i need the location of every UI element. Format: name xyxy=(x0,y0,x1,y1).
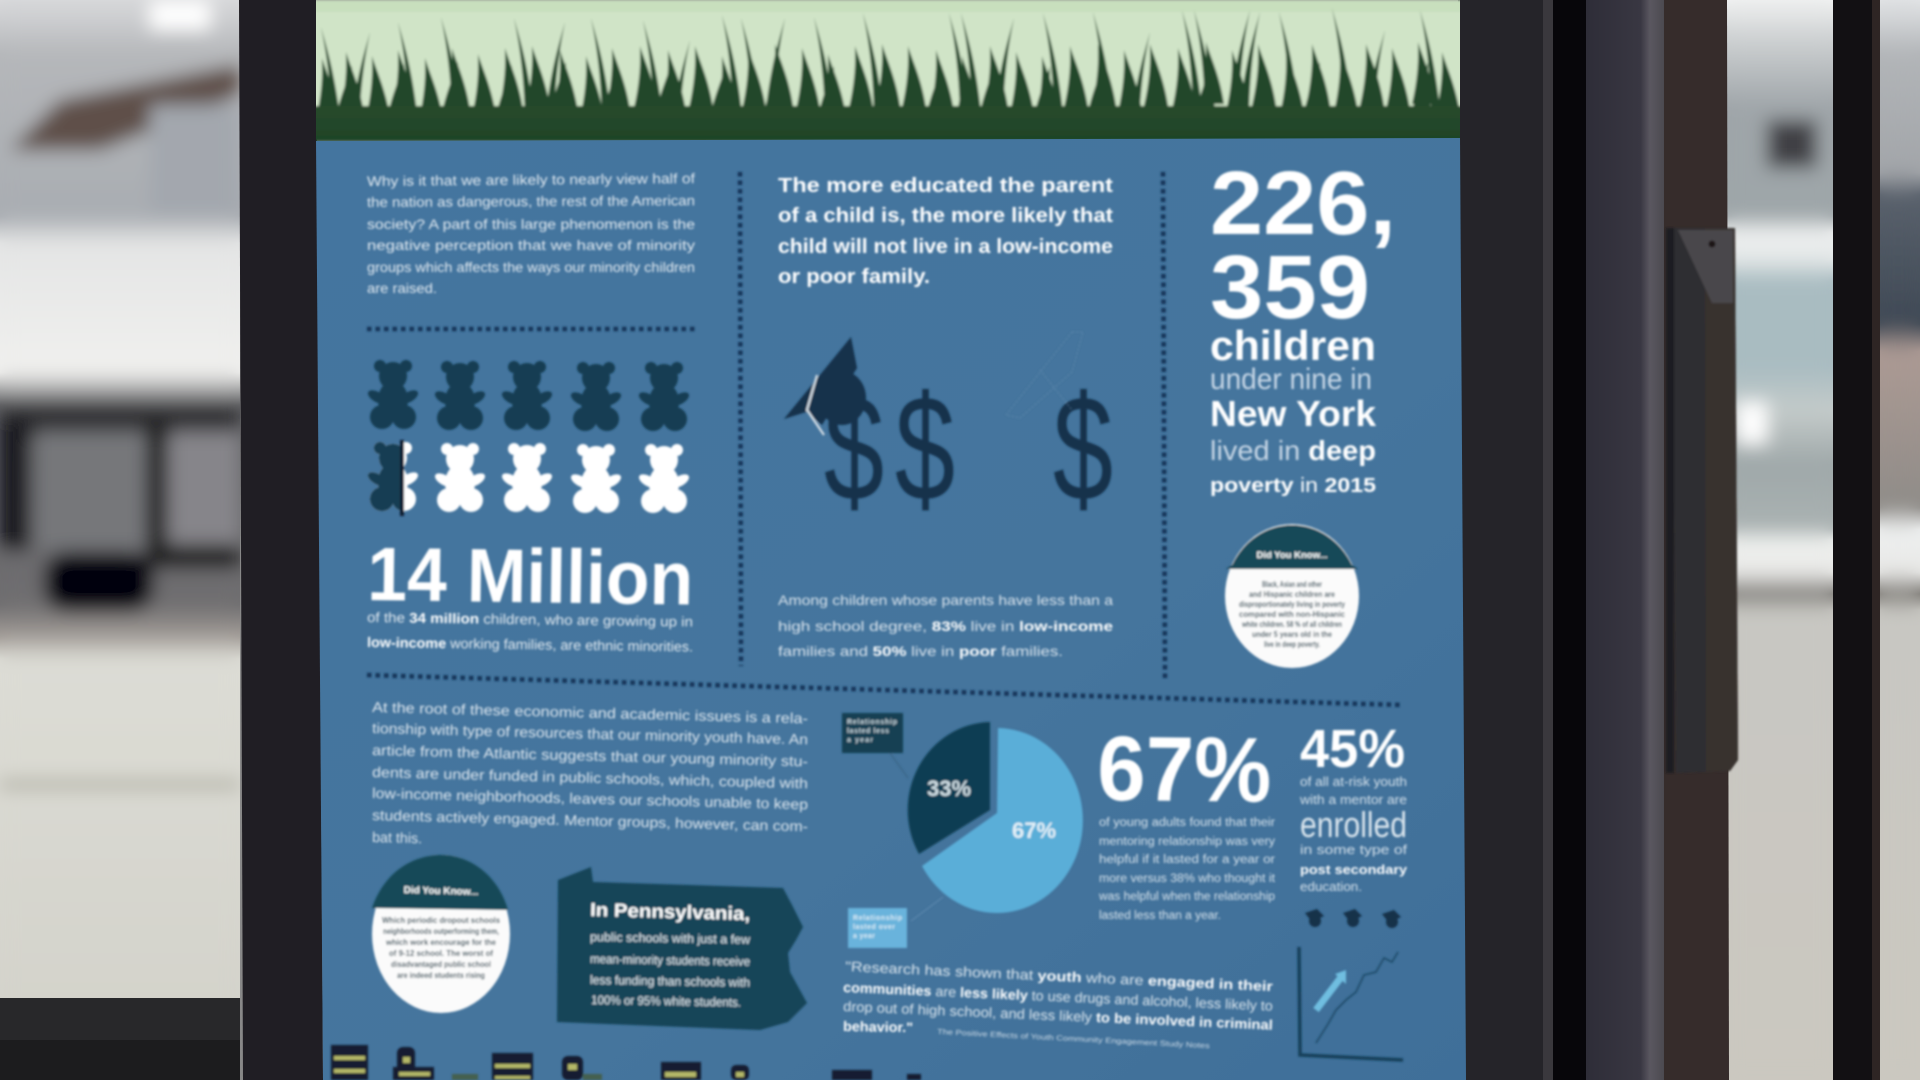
stat: 67%: helpful if it lasted for a year or xyxy=(1099,854,1275,866)
callout: did you know right xyxy=(1225,524,1359,668)
legend: light pie label: a year xyxy=(853,933,875,940)
text: parents caption: high school degree, 83% live in low-income xyxy=(778,618,1113,634)
icon: three small graduation caps xyxy=(1305,909,1401,928)
legend: light pie label xyxy=(848,897,943,948)
callout: did you know right: under 5 years old in the xyxy=(1252,630,1332,639)
text: parents caption xyxy=(778,592,1113,659)
callout: did you know left: Which periodic dropout schools xyxy=(382,916,501,925)
skyline: city buildings with lit windows xyxy=(331,1045,921,1080)
text: bottom left paragraph: bat this. xyxy=(372,830,422,847)
poster content group xyxy=(331,154,1408,1080)
panel: blue poster body xyxy=(316,138,1466,1080)
text: intro paragraph: the nation as dangerous, the rest of the American xyxy=(367,192,695,210)
stat: 67%: lasted less than a year. xyxy=(1099,910,1221,922)
text: 14 million caption: of the 34 million children, who are growing up in xyxy=(367,609,693,630)
legend: dark pie label: lasted less xyxy=(847,728,889,735)
text: intro paragraph: Why is it that we are likely to nearly view half of xyxy=(367,170,695,189)
stat: 45%: education. xyxy=(1300,880,1362,894)
text: bottom left paragraph xyxy=(372,700,808,847)
stat: 67%: more versus 38% who thought it xyxy=(1099,873,1276,885)
text: intro paragraph xyxy=(367,170,695,296)
frame: left poster frame xyxy=(239,0,323,1080)
line chart: rising graph with arrow xyxy=(1299,947,1403,1060)
icon: graduation cap dark xyxy=(784,337,866,435)
icon: graduation cap faint outline xyxy=(1006,332,1083,418)
tall grass blades xyxy=(321,12,1442,108)
stat: 226,359 children in New York xyxy=(1210,154,1396,497)
callout: did you know left: of 9-12 school. The worst of xyxy=(389,949,493,958)
icon grid: teddy bears 14 of 24 xyxy=(366,360,691,516)
text: bottom left paragraph: article from the Atlantic suggests that our young minority stu- xyxy=(372,743,808,770)
callout: Pennsylvania map: mean-minority students receive xyxy=(590,952,750,969)
stat: 14 Million: 14 Million xyxy=(367,532,694,622)
text: research quote: behavior." xyxy=(843,1018,913,1035)
heading: parent education: The more educated the parent xyxy=(778,175,1113,197)
callout: did you know left: neighborhoods outperforming them, xyxy=(383,927,499,936)
stat: 45%: with a mentor are xyxy=(1299,793,1407,807)
heading: parent education xyxy=(778,175,1113,288)
text: 14 million caption xyxy=(367,609,693,655)
stat: 226,359 children in New York: 226, xyxy=(1210,154,1396,254)
heading: parent education: or poor family. xyxy=(778,266,930,288)
icon: dollar signs xyxy=(824,364,1113,532)
door handle xyxy=(1666,228,1738,773)
frame: right poster frame and door posts xyxy=(1458,0,1880,1080)
text: bottom left paragraph: dents are under funded in public schools, which, coupled with xyxy=(372,765,808,792)
stat: 45%: post secondary xyxy=(1300,863,1407,877)
legend: light pie label: Relationship xyxy=(853,915,902,922)
pie chart: mentoring 33 / 67: 33% xyxy=(927,776,971,801)
text: research quote: "Research has shown that youth who are engaged in their xyxy=(845,958,1274,994)
callout: did you know right: live in deep poverty. xyxy=(1264,640,1320,649)
stat: 67%: mentoring relationship was very xyxy=(1099,836,1275,848)
stat: 67%: 67% xyxy=(1097,718,1272,822)
background: street scene right of door xyxy=(1725,0,1920,1080)
callout: did you know left: are indeed students rising xyxy=(397,971,485,980)
callout: Pennsylvania map: In Pennsylvania, xyxy=(590,900,750,925)
text: research quote: drop out of high school, and less likely to be involved in criminal xyxy=(843,998,1273,1033)
background: blurred street scene left xyxy=(0,0,240,1080)
callout: Pennsylvania map: public schools with just a few xyxy=(590,930,751,947)
stat: 45%: 45% xyxy=(1300,719,1405,779)
text: intro paragraph: negative perception that we have of minority xyxy=(367,237,695,253)
text: 14 million caption: low-income working families, are ethnic minorities. xyxy=(367,634,693,655)
callout: did you know left xyxy=(372,855,510,1013)
stat: 226,359 children in New York: poverty in 2015 xyxy=(1210,475,1376,497)
text: bottom left paragraph: At the root of these economic and academic issues is a rela- xyxy=(372,700,808,727)
text: bottom left paragraph: tionship with type of resources that our minority youth have. An xyxy=(372,721,808,748)
heading: parent education: of a child is, the more likely that xyxy=(778,205,1113,227)
stat: 226,359 children in New York: children xyxy=(1210,322,1376,369)
callout: Pennsylvania map xyxy=(557,867,807,1030)
stat: 67% xyxy=(1097,718,1276,922)
callout: did you know left: Did You Know... xyxy=(404,885,479,898)
dotted dividers xyxy=(367,172,1402,705)
stat: 226,359 children in New York: 359 xyxy=(1210,238,1370,338)
stat: 45%: in some type of xyxy=(1300,843,1408,857)
stat: 45%: enrolled xyxy=(1300,804,1407,845)
panel: grass header xyxy=(300,0,1480,141)
callout: Pennsylvania map: 100% or 95% white students. xyxy=(591,993,741,1010)
text: intro paragraph: society? A part of this large phenomenon is the xyxy=(367,216,695,232)
text: bottom left paragraph: low-income neighborhoods, leaves our schools unable to keep xyxy=(372,786,808,813)
legend: light pie label: lasted over xyxy=(853,924,895,931)
text: parents caption: Among children whose parents have less than a xyxy=(778,592,1113,608)
text: intro paragraph: are raised. xyxy=(367,280,437,296)
callout: did you know left: which work encourage for the xyxy=(385,938,497,947)
pie chart: mentoring 33 / 67: 67% xyxy=(1012,818,1056,843)
legend: dark pie label: a year xyxy=(847,737,873,744)
callout: did you know left: disadvantaged public school xyxy=(391,960,491,969)
text: research quote xyxy=(843,958,1274,1035)
second row of grass between blades xyxy=(336,62,1433,108)
legend: dark pie label: Relationship xyxy=(847,719,897,726)
callout: did you know right: disproportionately living in poverty xyxy=(1239,600,1345,609)
stat: 67%: of young adults found that their xyxy=(1099,817,1275,829)
callout: did you know right: and Hispanic children are xyxy=(1249,590,1335,599)
stat: 226,359 children in New York: New York xyxy=(1210,393,1377,434)
callout: Pennsylvania map: less funding than schools with xyxy=(590,973,750,990)
stat: 226,359 children in New York: lived in deep xyxy=(1210,435,1376,466)
icon: dollar signs: $ xyxy=(824,364,884,532)
text: parents caption: families and 50% live in poor families. xyxy=(778,643,1063,659)
callout: did you know right: Black, Asian and other xyxy=(1262,580,1322,589)
icon: dollar signs: $ xyxy=(895,364,955,532)
pie chart: mentoring 33 / 67 xyxy=(908,722,1083,913)
stat: 67%: was helpful when the relationship xyxy=(1098,891,1275,903)
legend: dark pie label xyxy=(842,713,908,778)
text: research quote: communities are less likely to use drugs and alcohol, less likely to xyxy=(843,979,1273,1014)
text: intro paragraph: groups which affects the ways our minority children xyxy=(367,259,695,275)
callout: did you know right: compared with non-Hispanic xyxy=(1239,610,1346,619)
callout: did you know right: Did You Know... xyxy=(1256,550,1328,561)
callout: did you know right: white children. 58 % of all children xyxy=(1241,620,1342,629)
icon: dollar signs: $ xyxy=(1053,364,1113,532)
stat: 45%: of all at-risk youth xyxy=(1300,775,1407,789)
text: quote citation: The Positive Effects of Youth Community Engagement Study Notes xyxy=(937,1027,1210,1050)
text: bottom left paragraph: students actively engaged. Mentor groups, however, can com- xyxy=(372,808,808,835)
stat: 226,359 children in New York: under nine in xyxy=(1210,363,1372,396)
dense grass mass xyxy=(318,42,1460,108)
heading: parent education: child will not live in a low-income xyxy=(778,236,1113,258)
stat: 45% xyxy=(1299,719,1408,894)
